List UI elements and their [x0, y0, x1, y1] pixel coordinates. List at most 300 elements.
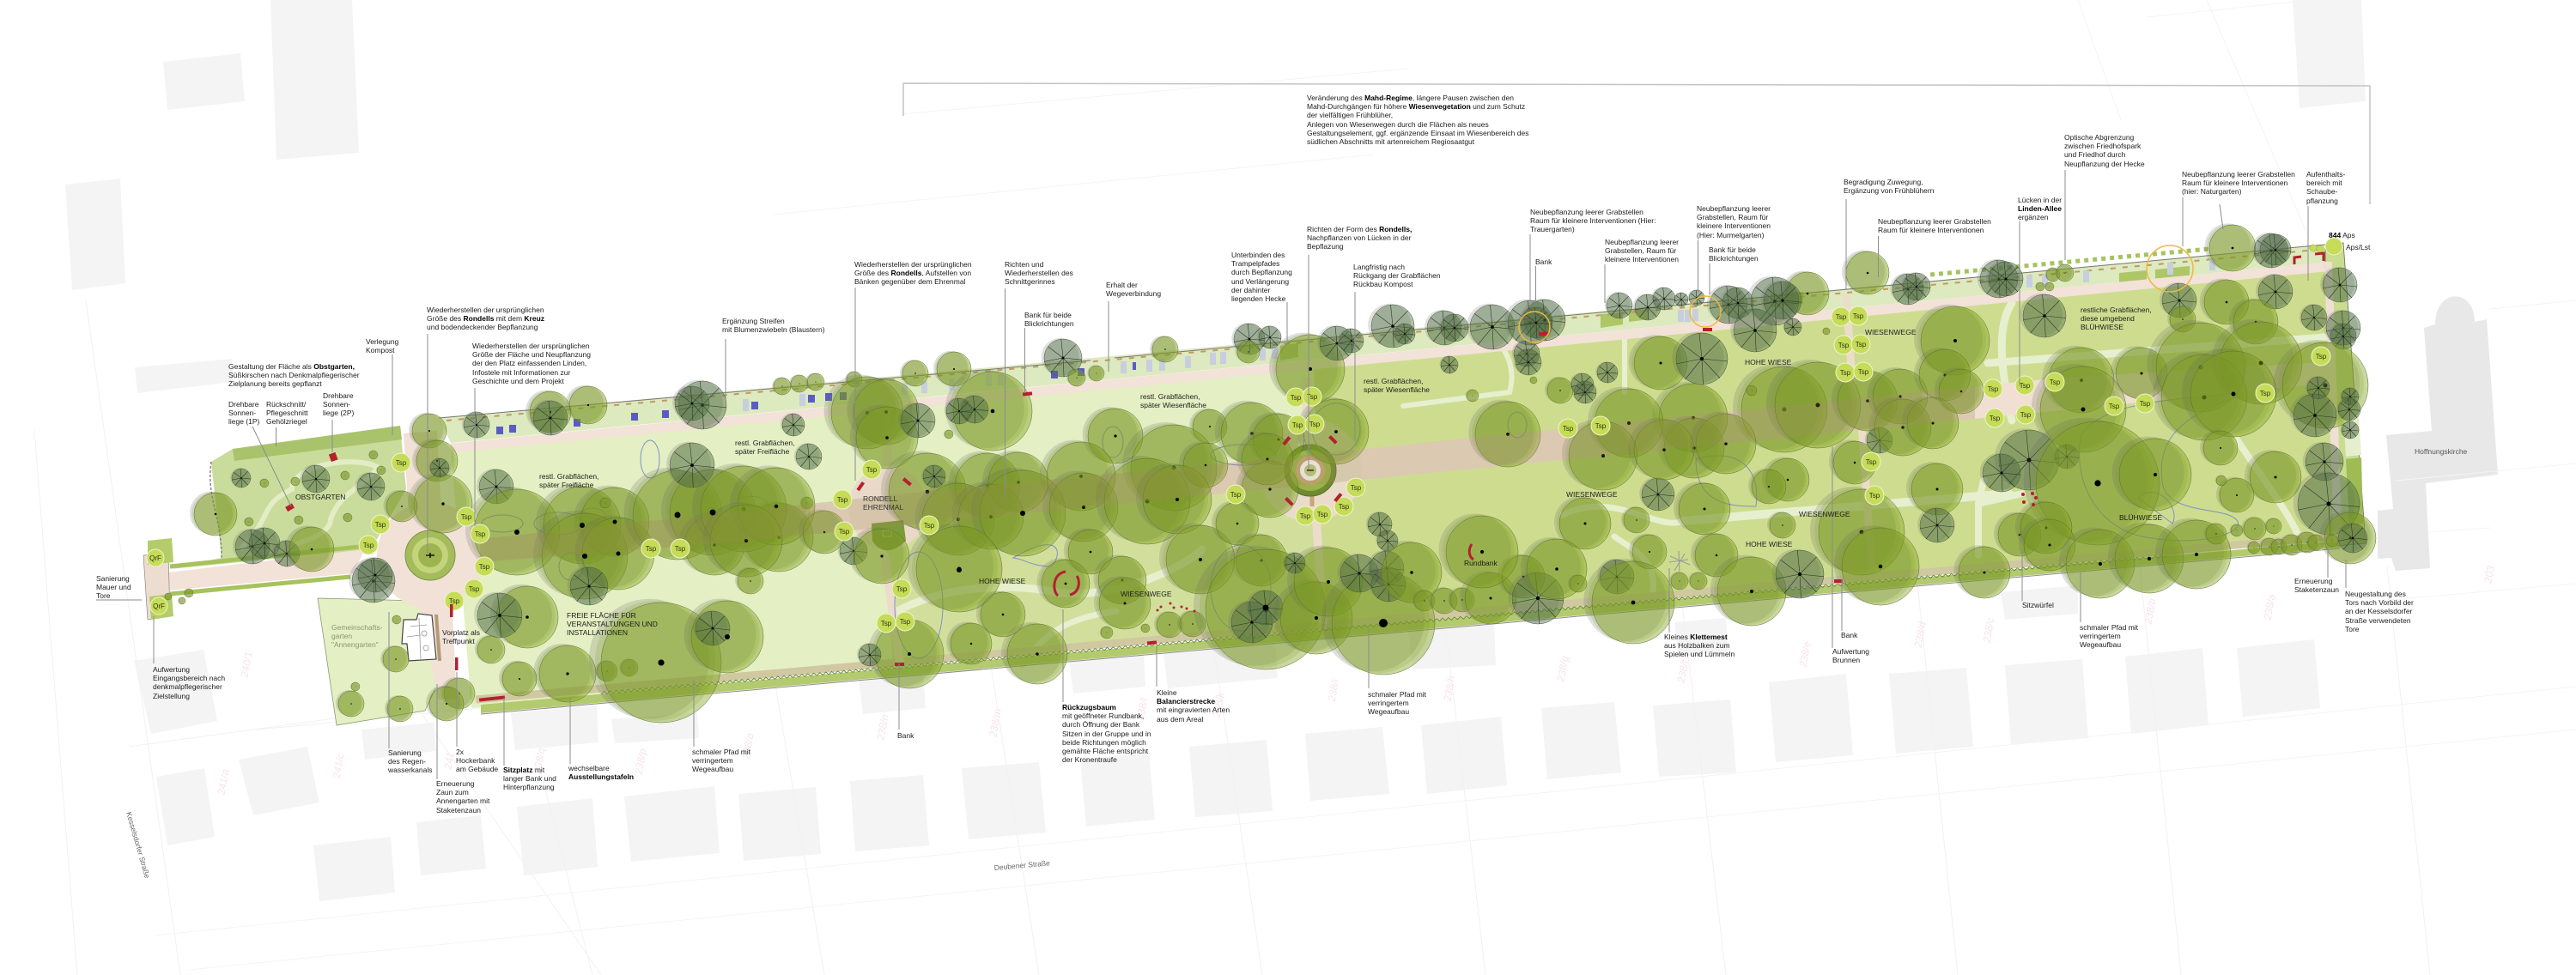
label: Neubepflanzung 2 [1878, 217, 1991, 234]
label: Drehbare Sonnenliege 2P: liege (2P) [323, 409, 354, 417]
label: Begradigung Zuwegung: Begradigung Zuwegung, [1844, 178, 1923, 186]
parcel numbers: 241/a [215, 768, 232, 796]
label: Fläche und Linden: Wiederherstellen der ursprünglichen [472, 342, 590, 350]
label: restl. Grabflächen Freifläche middle [735, 439, 794, 456]
area label: Freie Fläche: VERANSTALTUNGEN UND [567, 620, 658, 628]
label: Trampelpfad [1231, 251, 1292, 303]
label: Erneuerung Zaun: Staketenzaun [436, 806, 481, 815]
label: Klettemest: Spielen und Lümmeln [1664, 650, 1735, 658]
label: Sanierung Mauer und Tore: Mauer und [96, 583, 131, 591]
label: schmaler Pfad east [2080, 623, 2138, 650]
label: Klettemest [1664, 633, 1735, 659]
label: Neugestaltung Tor: Tore [2345, 625, 2360, 633]
label: Murmelgarten: Neubepflanzung leerer [1697, 204, 1771, 213]
label: Verlegung Kompost: Verlegung [366, 337, 398, 346]
label: Rückzugsbaum: durch Öffnung der Bank [1062, 720, 1139, 729]
parcel numbers: 238/p [632, 748, 649, 776]
Tsp tree badges: Tsp [2316, 353, 2327, 360]
label: Brunnen [1832, 647, 1869, 664]
label: restl. Grabflächen Freifläche west: restl. Grabflächen, [539, 472, 598, 481]
label: Rondell Form: Nachpflanzen von Lücken in der [1307, 233, 1411, 242]
label: Trampelpfad: Trampelpfades [1231, 259, 1279, 268]
label: Aufenthaltsbereich: pflanzung [2306, 197, 2338, 205]
Tsp tree badges: Tsp [1869, 492, 1880, 500]
label: Aufwertung Eingangsbereich: denkmalpflegerischer [153, 682, 222, 691]
label: Rondell Aufstellen Bänke: Bänken gegenüber dem Ehrenmal [854, 277, 965, 286]
label: Regenwasserkanal: wasserkanals [388, 766, 433, 774]
label: restl. Grabflächen Wiesenfläche 2: später Wiesenfläche [1364, 385, 1430, 394]
label: Obstgarten design: Gestaltung der Fläche als Obstgarten, [228, 362, 355, 371]
climbing nest [1669, 551, 1690, 573]
area label: Obstgarten: OBSTGARTEN [295, 493, 345, 501]
label: Bank für beide Blickrichtungen 2: Blickrichtungen [1709, 254, 1759, 263]
label: schmaler Pfad west [692, 748, 750, 773]
Tsp tree badges: Tsp [1307, 393, 1318, 401]
area label: Freie Fläche: INSTALLATIONEN [567, 628, 628, 637]
label: Vorplatz [442, 628, 480, 645]
area label: Gemeinschaftsgarten [331, 623, 383, 649]
parcel numbers [215, 565, 2497, 796]
label: Erneuerung Staketenzaun: Erneuerung [2294, 577, 2332, 585]
label: Hockerbank: am Gebäude [456, 765, 498, 773]
Tsp tree badges: Tsp [675, 545, 686, 553]
Tsp tree badges: Tsp [396, 459, 407, 467]
label: schmaler Pfad west: Wegeaufbau [692, 765, 733, 773]
Tsp tree badges: Tsp [449, 597, 460, 605]
Tsp tree badges: Tsp [866, 466, 878, 474]
label: Neubepflanzung 2: Raum für kleinere Interventionen [1878, 226, 1984, 234]
Tsp tree badges: Tsp [1858, 368, 1869, 376]
label: Obstgarten design: Zielplanung bereits gepflanzt [228, 379, 322, 388]
grave markers pale [743, 258, 2215, 411]
label: restl. Grabflächen Wiesenfläche 1: restl. Grabflächen, [1140, 392, 1200, 401]
label: Drehbare Sonnenliege 1P: liege (1P) [228, 417, 259, 426]
Annengarten area [318, 598, 436, 725]
Tsp tree badges: Tsp [1230, 491, 1242, 499]
label: Aufwertung Eingangsbereich [153, 665, 225, 700]
Tsp tree badges: Tsp [2050, 378, 2061, 386]
Tsp tree badges: Tsp [1990, 415, 2001, 422]
label: Fläche und Linden: Größe der Fläche und Neupflanzung [472, 350, 591, 359]
label: Vorplatz: Treffpunkt [442, 637, 475, 645]
parcel numbers: 241/c [330, 753, 347, 780]
label: Wegeverbindung: Erhalt der [1106, 281, 1138, 289]
large trunk dots on alley [514, 481, 2100, 666]
trees: west section [164, 380, 763, 723]
Tsp tree badges: Tsp [1840, 369, 1851, 377]
area label: Rondell Ehrenmal: RONDELL [863, 494, 897, 503]
label: Balancierstrecke: mit eingravierten Arten [1157, 706, 1230, 714]
label: Neubepflanzung 1: Neubepflanzung leerer [1605, 238, 1679, 246]
label: Kompost Rückbau [1353, 263, 1441, 288]
label: Rundbank: Rundbank [1464, 559, 1498, 567]
label: 844 Aps: 844 Aps [2329, 231, 2355, 239]
parcel numbers: 238/i [1326, 678, 1341, 703]
label: Klettemest: aus Holzbalken zum [1664, 641, 1730, 650]
label: Drehbare Sonnenliege 2P: Drehbare [323, 391, 353, 400]
label: Bank für beide Blickrichtungen 2: Bank für beide [1709, 245, 1756, 254]
label: Schnittgerinne: Richten und [1005, 260, 1043, 269]
label: Erneuerung Zaun: Annengarten mit [436, 796, 489, 805]
label: Murmelgarten [1697, 204, 1771, 239]
label: schmaler Pfad east: schmaler Pfad mit [2080, 623, 2138, 632]
area label: Blühwiese: BLÜHWIESE [2119, 513, 2162, 522]
label: restl. Grabflächen Wiesenfläche 1 [1140, 392, 1206, 409]
label: restliche Grabflächen Blühwiese [2081, 306, 2152, 332]
label: Balancierstrecke: aus dem Areal [1157, 715, 1203, 724]
Tsp tree badges: Tsp [375, 521, 386, 529]
label: Begradigung Zuwegung [1844, 178, 1934, 195]
label: Aufwertung Eingangsbereich: Zielstellung [153, 692, 190, 700]
parcel numbers: 238/e [1796, 640, 1814, 669]
Tsp tree badges: Tsp [1291, 394, 1302, 402]
blue and yellow survey outlines [482, 394, 2239, 658]
street names: Deubener Straße [993, 858, 1050, 872]
label: Neugestaltung Tor: Tors nach Vorbild der [2345, 598, 2414, 607]
label: Brunnen: Aufwertung [1832, 647, 1869, 656]
label: schmaler Pfad west: verringertem [692, 756, 733, 765]
top grave strip [439, 243, 2343, 443]
area label: Wiesenwege 3: WIESENWEGE [1566, 490, 1618, 499]
area label: Hohe Wiese 1: HOHE WIESE [979, 577, 1025, 585]
parcel numbers: 238/a [2261, 593, 2278, 621]
area label: Hohe Wiese 2: HOHE WIESE [1745, 358, 1791, 366]
label: Neubepflanzung 2: Neubepflanzung leerer Grabstellen [1878, 217, 1991, 226]
right border strip [2324, 243, 2366, 546]
label: Schnittgerinne: Schnittgerinnes [1005, 277, 1055, 286]
label: Mahd-Regime: der vielfältigen Frühblüher, [1307, 111, 1393, 119]
label: Naturgarten: Neubepflanzung leerer Grabstellen [2182, 170, 2295, 179]
label: Aufenthaltsbereich: Schaube- [2306, 187, 2337, 196]
label: Aufwertung Eingangsbereich: Eingangsbereich nach [153, 674, 225, 682]
Tsp tree badges: Tsp [1563, 425, 1574, 433]
label: Balancierstrecke: Kleine [1157, 688, 1177, 697]
entrance block [143, 538, 173, 620]
Tsp tree badges: QrF [149, 554, 161, 562]
label: Fläche und Linden: Geschichte und dem Projekt [472, 377, 564, 385]
Tsp tree badges: Tsp [363, 542, 374, 549]
label: Mahd-Regime [1307, 94, 1528, 146]
label: Rückzugsbaum: Rückzugsbaum [1062, 703, 1116, 712]
label: Sitzwürfel: Sitzwürfel [2022, 601, 2054, 609]
label: Naturgarten: Raum für kleinere Interventionen [2182, 179, 2287, 187]
label: Balancierstrecke [1157, 688, 1230, 724]
Tsp tree badges: Tsp [1836, 313, 1847, 321]
label: Rückschnitt [266, 400, 308, 426]
label: Rückschnitt: Gehölzriegel [266, 417, 307, 426]
Tsp tree badges: Tsp [1988, 385, 1999, 393]
label: Aps/Lst: Aps/Lst [2346, 243, 2370, 251]
parcel numbers: 241 [441, 751, 457, 771]
parcel numbers: 238/n [874, 713, 891, 742]
community building [402, 614, 440, 661]
Tsp tree badges: Tsp [646, 545, 657, 553]
label: Kompost Rückbau: Langfristig nach [1353, 263, 1405, 271]
rondell: west plaza [377, 502, 483, 609]
red bench outlines: Rundbank, Rückzugsbaum, corners [1054, 253, 2324, 596]
label: Rückzugsbaum: beide Richtungen möglich [1062, 738, 1146, 747]
label: Neugestaltung Tor: Straße verwendeten [2345, 616, 2411, 625]
label: Linden-Allee: ergänzen [2018, 213, 2048, 221]
label: Linden-Allee: Lücken in der [2018, 196, 2062, 204]
label: Obstgarten design: Süßkirschen nach Denkmalpflegerischer [228, 371, 360, 379]
label: Aufenthaltsbereich: Aufenthalts- [2306, 170, 2345, 179]
rondell: memorial circle [1259, 419, 1362, 522]
label: Trauergarten [1530, 208, 1656, 233]
yellow highlight rings [1519, 245, 2193, 342]
label: Trauergarten: Neubepflanzung leerer Grabstellen [1530, 208, 1643, 216]
label: Hockerbank [456, 748, 498, 773]
Tsp tree badges: Tsp [1292, 421, 1303, 429]
label: Rückzugsbaum: Sitzen in der Gruppe und in [1062, 730, 1151, 738]
label: Schnittgerinne [1005, 260, 1073, 286]
label: Brunnen: Brunnen [1832, 656, 1860, 664]
label: restl. Grabflächen Freifläche middle: restl. Grabflächen, [735, 439, 794, 447]
Tsp tree badges: Tsp [479, 563, 490, 571]
alley tint over tree canopy [480, 386, 1975, 562]
label: schmaler Pfad west: schmaler Pfad mit [692, 748, 750, 756]
label: Rückzugsbaum [1062, 703, 1151, 764]
parcel numbers: 238/d [1911, 621, 1929, 649]
area label: Wiesenwege 1: WIESENWEGE [1121, 590, 1172, 598]
label: Rückzugsbaum: gemähte Fläche entspricht [1062, 747, 1148, 755]
label: Regenwasserkanal: des Regen- [388, 757, 426, 766]
parcel numbers: 238/o [739, 732, 756, 760]
label: Kompost Rückbau: Rückgang der Grabflächen [1353, 271, 1441, 280]
label: Wegeverbindung [1106, 281, 1161, 298]
label: Bank für beide Blickrichtungen 1: Blickrichtungen [1024, 319, 1074, 328]
label: Optische Abgrenzung: und Friedhof durch [2064, 150, 2125, 159]
label: Linden-Allee [2018, 196, 2062, 221]
label: Neugestaltung Tor: Neugestaltung des [2345, 590, 2406, 598]
blue star bulb patches [496, 362, 1136, 434]
label: Fläche und Linden [472, 342, 591, 385]
Tsp tree badges: Tsp [924, 522, 935, 530]
Tsp tree badges: Tsp [2260, 390, 2271, 397]
label: Sanierung Mauer und Tore [96, 574, 131, 600]
balancing course stones [1156, 492, 2038, 613]
label: Obstgarten design [228, 362, 360, 388]
Tsp tree badges: Tsp [1866, 458, 1877, 466]
Tsp tree badges: Tsp [1853, 312, 1864, 320]
label: Neubepflanzung 1: Grabstellen, Raum für [1605, 246, 1676, 255]
parcel numbers: 238/g [1554, 655, 1571, 683]
park meadow base [451, 262, 2337, 708]
label: Mahd-Regime: Anlegen von Wiesenwegen durch die Flächen als neues [1307, 120, 1489, 129]
label: Mahd-Regime: Gestaltungselement, ggf. ergänzende Einsaat im Wiesenbereich des [1307, 129, 1528, 137]
parcel numbers: 238/f [1675, 657, 1692, 685]
area label: Hohe Wiese 3: HOHE WIESE [1746, 540, 1792, 548]
Tsp tree badges: Tsp [1309, 421, 1321, 428]
label: Neubepflanzung 1 [1605, 238, 1679, 263]
Tsp tree badges: Tsp [461, 513, 472, 521]
Tsp tree badges: QrF [153, 603, 165, 610]
street names [125, 811, 1050, 880]
label: Optische Abgrenzung: Optische Abgrenzung [2064, 133, 2134, 142]
trees: middle section [692, 323, 1564, 688]
label: Bank für beide Blickrichtungen 1 [1024, 311, 1074, 328]
label: Erneuerung Zaun: Erneuerung [436, 779, 474, 788]
label: Fläche und Linden: der den Platz einfassenden Linden, [472, 359, 586, 367]
Obstgarten area [170, 426, 406, 569]
area label: Gemeinschaftsgarten: "Annengarten" [331, 640, 379, 649]
label: Trauergarten: Raum für kleinere Interventionen (Hier: [1530, 216, 1656, 225]
parcel numbers: 238/b [2142, 597, 2159, 626]
area label: Freie Fläche: FREIE FLÄCHE FÜR [567, 611, 636, 620]
label: Trampelpfad: Unterbinden des [1231, 251, 1285, 259]
label: restl. Grabflächen Freifläche west [539, 472, 598, 489]
label: Mahd-Regime: Veränderung des Mahd-Regime, längere Pausen zwischen den [1307, 94, 1514, 102]
label: Drehbare Sonnenliege 2P: Sonnen- [323, 400, 350, 409]
label: Hockerbank: 2x [456, 748, 464, 756]
Tsp tree badges: Tsp [837, 496, 848, 504]
label: restl. Grabflächen Freifläche middle: später Freifläche [735, 447, 789, 456]
area label: Rondell Ehrenmal: EHRENMAL [863, 503, 903, 512]
label: Drehbare Sonnenliege 1P: Drehbare [228, 400, 258, 409]
label: Fläche und Linden: Infostele mit Informationen zur [472, 368, 570, 377]
Tsp tree badges: Tsp [1351, 484, 1362, 492]
label: Aufwertung Eingangsbereich: Aufwertung [153, 665, 190, 674]
label: Rondell Kreuz: Größe des Rondells mit dem Kreuz [427, 314, 544, 323]
Tsp tree badges: Tsp [839, 528, 850, 536]
label: Hoffnungskirche: Hoffnungskirche [2415, 447, 2467, 456]
top reference line [903, 83, 2370, 204]
label: Trampelpfad: und Verlängerung [1231, 277, 1289, 286]
Tsp tree badges: Tsp [1838, 342, 1850, 349]
label: Bank für beide Blickrichtungen 1: Bank für beide [1024, 311, 1072, 319]
label: Sanierung Mauer und Tore: Sanierung [96, 574, 130, 583]
label: Bank für beide Blickrichtungen 2 [1709, 245, 1759, 263]
label: Naturgarten [2182, 170, 2295, 197]
label: Rückzugsbaum: mit geöffneter Rundbank, [1062, 712, 1144, 720]
label: Optische Abgrenzung: zwischen Friedhofspark [2064, 142, 2141, 150]
label: Ergänzung Streifen: Ergänzung Streifen [722, 317, 785, 325]
trees: east section [1868, 223, 2376, 598]
label: schmaler Pfad middle [1368, 690, 1426, 717]
Tsp tree badges: Tsp [2020, 411, 2032, 419]
area label: Rondell Ehrenmal [863, 494, 903, 512]
label: Sitzplatz: Sitzplatz mit [503, 766, 544, 774]
main walkways [168, 267, 2351, 714]
parcel numbers: 238/l [1134, 697, 1150, 722]
Tsp tree badges: Tsp [1856, 341, 1867, 348]
label: schmaler Pfad middle: Wegeaufbau [1368, 707, 1409, 716]
label: Ergänzung Streifen: mit Blumenzwiebeln (Blaustern) [722, 325, 825, 334]
label: Aufenthaltsbereich: bereich mit [2306, 179, 2342, 187]
parcel numbers: 238/k [1210, 691, 1227, 719]
label: Rondell Kreuz: und bodendeckender Bepflanzung [427, 323, 538, 331]
label: Murmelgarten: kleinere Interventionen [1697, 221, 1771, 230]
parcel numbers: 203 [2482, 565, 2497, 584]
label: Klettemest: Kleines Klettemest [1664, 633, 1728, 641]
label: restl. Grabflächen Wiesenfläche 1: später Wiesenfläche [1140, 401, 1206, 409]
label: Erneuerung Staketenzaun [2294, 577, 2339, 594]
label: Hockerbank: Hockerbank [456, 756, 495, 765]
Tsp tree badges: Tsp [475, 530, 486, 538]
label: schmaler Pfad middle: verringertem [1368, 699, 1409, 707]
label: Rondell Kreuz: Wiederherstellen der ursprünglichen [427, 306, 544, 314]
label: Naturgarten: (hier: Naturgarten) [2182, 187, 2241, 196]
Tsp tree badges: Tsp [896, 585, 908, 593]
label: Rückschnitt: Rückschnitt/ [266, 400, 306, 409]
Tsp tree badges: Tsp [2140, 400, 2151, 408]
label: Murmelgarten: (Hier: Murmelgarten) [1697, 231, 1764, 239]
label: Ergänzung Streifen [722, 317, 825, 334]
label: restl. Grabflächen Wiesenfläche 2: restl. Grabflächen, [1364, 377, 1423, 385]
label: Wegeverbindung: Wegeverbindung [1106, 289, 1161, 298]
label: Drehbare Sonnenliege 1P [228, 400, 259, 426]
area label: Wiesenwege 2: WIESENWEGE [1865, 328, 1917, 336]
label: Drehbare Sonnenliege 1P: Sonnen- [228, 409, 256, 417]
label: Rückschnitt: Pflegeschnitt [266, 409, 308, 417]
Tsp tree badges: Tsp [881, 620, 892, 627]
label: Rondell Kreuz [427, 306, 544, 331]
label: Erneuerung Staketenzaun: Staketenzaun [2294, 585, 2339, 594]
Tsp tree badges: Tsp [2109, 403, 2120, 410]
label: Rückzugsbaum: der Kronentraufe [1062, 755, 1117, 764]
label: Rondell Aufstellen Bänke: Größe des Rondells, Aufstellen von [854, 269, 971, 277]
label: restliche Grabflächen Blühwiese: diese umgebend [2081, 314, 2135, 323]
church: Hoffnungskirche [2378, 296, 2498, 571]
label: Murmelgarten: Grabstellen, Raum für [1697, 213, 1768, 221]
Tsp tree badges: Tsp [1595, 422, 1607, 430]
street names: Kesselsdorfer Straße [125, 811, 152, 880]
label: Ausstellungstafeln [568, 764, 634, 781]
label: Sanierung Mauer und Tore: Tore [96, 591, 111, 600]
parcel numbers: 238/h [1441, 675, 1458, 703]
label: Verlegung Kompost: Kompost [366, 346, 395, 354]
label: Erneuerung Zaun [436, 779, 489, 815]
label: restliche Grabflächen Blühwiese: restliche Grabflächen, [2081, 306, 2152, 314]
label: Bank east: Bank [1841, 631, 1857, 639]
label: Regenwasserkanal [388, 748, 433, 774]
label: Ausstellungstafeln: Ausstellungstafeln [568, 772, 634, 781]
label: Neugestaltung Tor [2345, 590, 2414, 633]
label: restl. Grabflächen Wiesenfläche 2 [1364, 377, 1430, 394]
label: Bank south: Bank [897, 731, 914, 740]
label: Rondell Form: Richten der Form des Rondells, [1307, 225, 1412, 233]
label: Trampelpfad: der dahinter [1231, 286, 1270, 294]
label: Schnittgerinne: Wiederherstellen des [1005, 269, 1073, 277]
label: Sitzplatz [503, 766, 556, 791]
trees: east-middle section [1317, 251, 1963, 644]
label: Sitzplatz: langer Bank und [503, 774, 556, 783]
parcel numbers: 240/1 [238, 651, 255, 679]
parcel numbers: 238/c [1980, 617, 1997, 645]
label: Trauergarten: Trauergarten) [1530, 225, 1575, 233]
label: Neugestaltung Tor: an der Kesselsdorfer [2345, 607, 2412, 615]
parcel numbers: 238/m [987, 708, 1004, 739]
label: Bank top: Bank [1535, 257, 1552, 266]
label: Linden-Allee: Linden-Allee [2018, 204, 2062, 213]
area label: Gemeinschaftsgarten: Gemeinschafts- [331, 623, 383, 632]
label: schmaler Pfad east: verringertem [2080, 632, 2121, 640]
label: Sitzplatz: Hinterpflanzung [503, 783, 555, 791]
label: Ausstellungstafeln: wechselbare [568, 764, 610, 772]
label: Trampelpfad: durch Bepflanzung [1231, 268, 1292, 276]
Tsp tree badges: Tsp [1339, 503, 1350, 511]
Tsp tree badges: Tsp [2020, 382, 2031, 390]
label: Neubepflanzung 1: kleinere Interventionen [1605, 255, 1679, 263]
label: Verlegung Kompost [366, 337, 398, 354]
area label: Gemeinschaftsgarten: garten [331, 632, 352, 640]
Tsp tree badges: Tsp [1300, 512, 1311, 520]
label: schmaler Pfad middle: schmaler Pfad mit [1368, 690, 1426, 699]
label: Erneuerung Zaun: Zaun zum [436, 788, 469, 796]
red benches [285, 328, 1843, 702]
label: Kompost Rückbau: Rückbau Kompost [1353, 280, 1413, 288]
label: Mahd-Regime: südlichen Abschnitts mit artenreichem Regiosaatgut [1307, 137, 1474, 146]
